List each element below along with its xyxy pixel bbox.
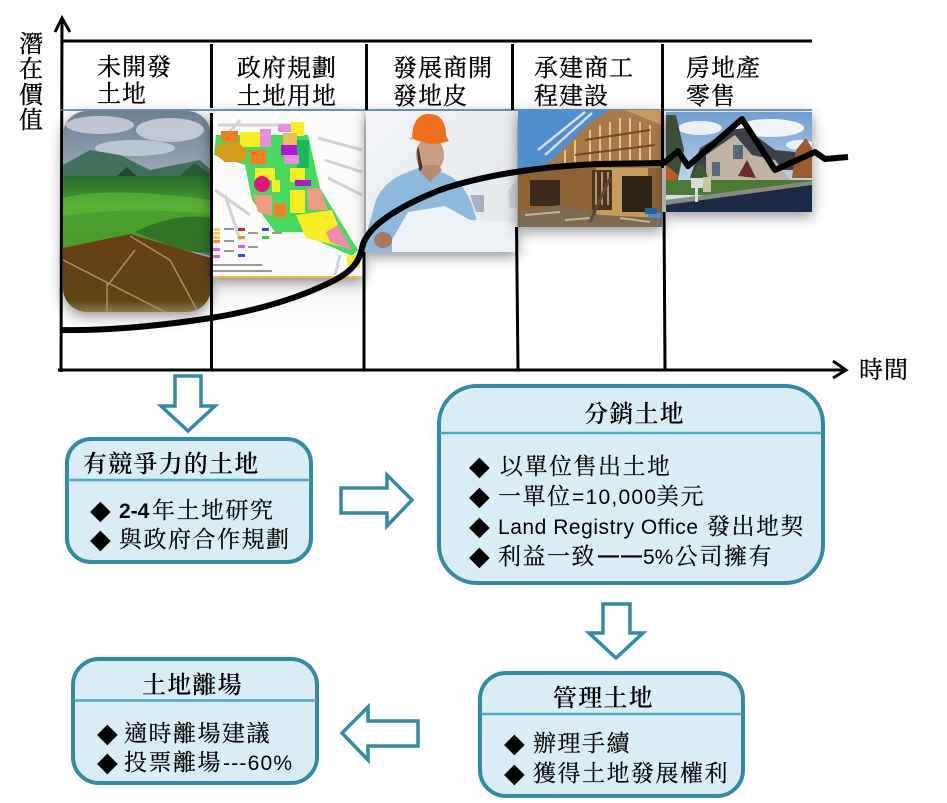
- bullet: unit price: 美元: [656, 484, 705, 509]
- heading: 管理土地: [553, 685, 654, 712]
- bullet: exit advice: [97, 718, 271, 749]
- bullet: research: ◆: [90, 495, 111, 526]
- panel: land management: [480, 673, 743, 796]
- bullet: unit price: [469, 481, 705, 512]
- arrow: to land exit: [342, 707, 418, 760]
- stage label: developer: [393, 55, 493, 110]
- bullet: exit advice: 適時離場建議: [124, 721, 271, 746]
- bullet: exit advice: ◆: [97, 718, 118, 749]
- y axis label: 在: [19, 56, 44, 83]
- bullet: unit price: ◆: [469, 481, 490, 512]
- heading: 土地離場: [142, 672, 243, 699]
- photo: developer engineer: [366, 111, 517, 252]
- panel: land distribution: [439, 386, 823, 583]
- map reflection: [211, 278, 364, 330]
- arrow: to land management: [589, 604, 643, 658]
- bullet: alignment: 公司擁有: [675, 544, 773, 569]
- bullet: sell by unit: 以單位售出土地: [500, 454, 672, 479]
- bullet: alignment: ◆: [469, 541, 490, 572]
- x axis arrow: [58, 361, 846, 378]
- bullet: development rights: ◆: [504, 758, 525, 789]
- photo: real estate house: [666, 112, 814, 212]
- chart frame: value over time: [55, 18, 846, 378]
- stage label: government planning: [237, 55, 337, 110]
- bullet: exit vote: [97, 747, 292, 778]
- bullet: land registry: [469, 511, 805, 542]
- bullet: development rights: 獲得土地發展權利: [533, 761, 729, 786]
- arrow: chart to competitive land: [161, 376, 215, 431]
- stage label: retail: 零售: [686, 83, 736, 110]
- value curve: [61, 119, 848, 330]
- stage label: developer: 發展商開: [393, 55, 493, 82]
- photo: contractor construction site: [518, 110, 662, 227]
- bullet: research: 2-4: [119, 500, 150, 523]
- bullet: sell by unit: [469, 451, 672, 482]
- stage label: contractor: 程建設: [534, 83, 609, 110]
- bullet: paperwork: [504, 728, 632, 759]
- stage label: undeveloped land: 土地: [97, 81, 147, 108]
- bullet: unit price: 一單位: [498, 484, 572, 509]
- bullet: alignment: [469, 541, 773, 572]
- arrow: to land distribution: [341, 475, 412, 526]
- bullet: alignment: ——: [598, 544, 642, 567]
- stage label: government planning: 土地用地: [237, 83, 337, 110]
- heading: 有競爭力的土地: [83, 451, 259, 478]
- bullet: planning: [90, 524, 290, 555]
- bullet: research: [90, 495, 274, 526]
- stage label: contractor: [534, 55, 634, 110]
- bullet: unit price: =10,000: [572, 486, 656, 509]
- y axis label: 價: [19, 82, 45, 109]
- x axis label: 時間: [859, 357, 909, 384]
- top border: [62, 40, 812, 42]
- bullet: planning: 與政府合作規劃: [119, 527, 290, 552]
- y axis arrow: [55, 18, 70, 372]
- panel: competitive land: [67, 439, 311, 562]
- bullet: alignment: 利益一致: [498, 544, 596, 569]
- bullet: land registry: Land Registry Office: [498, 516, 698, 539]
- y axis label: 潛: [19, 32, 44, 58]
- bullet: research: 年土地研究: [152, 498, 274, 523]
- heading: 分銷土地: [584, 401, 685, 428]
- bullet: land registry: ◆: [469, 511, 490, 542]
- stage label: contractor: 承建商工: [534, 55, 634, 82]
- bullet: sell by unit: ◆: [469, 451, 490, 482]
- bullet: paperwork: ◆: [504, 728, 525, 759]
- photo: government zoning map: [211, 111, 364, 330]
- bullet: paperwork: 辦理手續: [533, 731, 632, 756]
- bullet: planning: ◆: [90, 524, 111, 555]
- photo: undeveloped land: [63, 111, 211, 312]
- bullet: land registry: 發出地契: [707, 514, 805, 539]
- bullet: exit vote: ---60%: [223, 752, 292, 775]
- stage label: retail: 房地產: [686, 55, 761, 82]
- header baseline: [60, 109, 812, 111]
- bullet: alignment: 5%: [643, 546, 673, 569]
- stage label: developer: 發地皮: [393, 83, 468, 110]
- bullet: exit vote: 投票離場: [124, 750, 222, 775]
- stage dividers: [212, 44, 665, 370]
- stage label: undeveloped land: 未開發: [97, 54, 172, 81]
- stage label: government planning: 政府規劃: [237, 55, 337, 82]
- panel: land exit: [73, 659, 317, 783]
- y axis label: [19, 32, 45, 134]
- stage label: retail: [686, 55, 761, 110]
- bullet: exit vote: ◆: [97, 747, 118, 778]
- y axis label: 值: [19, 107, 44, 134]
- stage label: undeveloped land: [97, 54, 172, 108]
